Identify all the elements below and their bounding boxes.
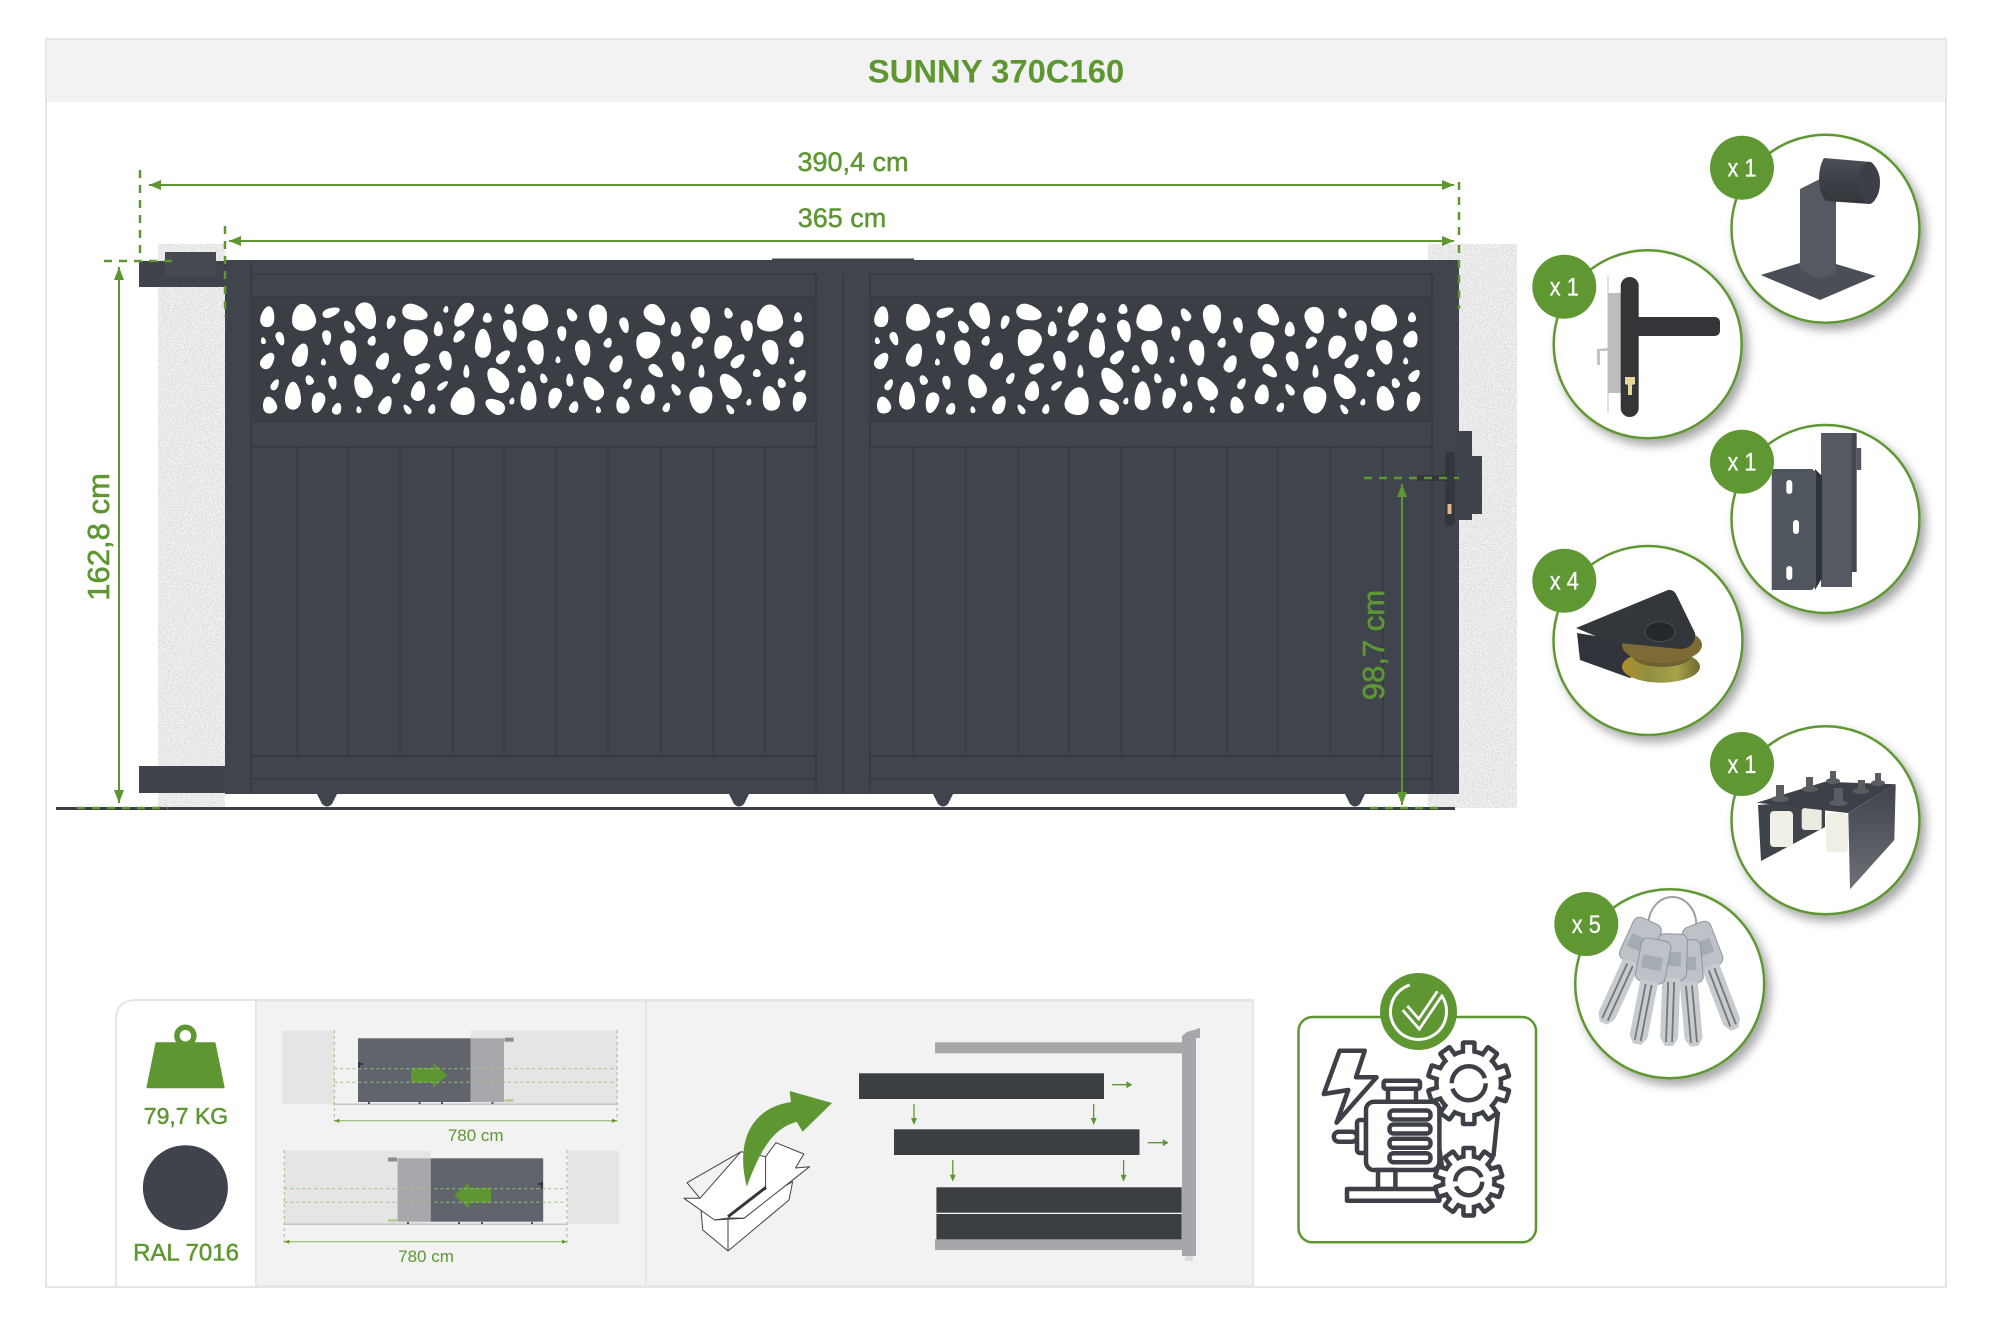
quantity badge xyxy=(1554,892,1618,956)
quantity badge xyxy=(1532,255,1596,319)
dimension: 365 cm: 365 cm xyxy=(798,203,886,233)
diagram: sliding right xyxy=(282,1030,617,1145)
quantity badge xyxy=(1710,732,1774,796)
quantity badge xyxy=(1710,430,1774,494)
upper wall bracket xyxy=(139,252,225,287)
accessory: gate stop post xyxy=(1710,135,1920,323)
fitting frame xyxy=(935,1028,1200,1261)
left wall pillar xyxy=(158,244,225,808)
dimension: 365 cm xyxy=(225,203,1459,317)
check badge xyxy=(1380,973,1457,1050)
left leaf perforated pattern xyxy=(258,299,808,418)
icon: open cardboard box xyxy=(684,1143,810,1251)
quantity badge: x 4 xyxy=(1550,568,1579,596)
right wall pillar xyxy=(1428,244,1517,808)
accessory: keys xyxy=(1554,889,1764,1078)
gear: upper xyxy=(1425,1040,1512,1126)
quantity badge: x 1 xyxy=(1550,274,1579,302)
diagram: sliding left xyxy=(284,1150,619,1266)
dimension: 98,7 cm xyxy=(1356,478,1459,808)
accessory: guide roller box xyxy=(1710,726,1920,914)
arrow: out of the box xyxy=(743,1091,832,1187)
title band xyxy=(47,40,1945,102)
motor card xyxy=(1298,973,1536,1242)
colour label: RAL 7016 xyxy=(133,1240,239,1266)
lower wall bracket xyxy=(139,766,225,793)
quantity badge: x 1 xyxy=(1728,751,1756,779)
quantity badge: x 1 xyxy=(1728,154,1756,182)
dimension: 390,4 cm xyxy=(140,147,1459,261)
ground line xyxy=(56,807,1455,810)
icon: motor and gears xyxy=(1324,1040,1512,1218)
dimension: 162,8 cm: 162,8 cm xyxy=(81,473,116,601)
colour swatch xyxy=(143,1145,228,1230)
perforated panel backgrounds xyxy=(252,298,1431,420)
lock and handle xyxy=(1416,431,1482,526)
gate wheels xyxy=(317,794,1365,806)
dimension: 162,8 cm xyxy=(77,261,175,808)
weight icon xyxy=(148,1027,224,1087)
right leaf perforated pattern xyxy=(872,299,1422,418)
cell: unpacking background xyxy=(646,1001,1253,1286)
accessory: lock keep bracket xyxy=(1710,425,1920,613)
quantity badge: x 5 xyxy=(1572,911,1601,939)
dimension: 98,7 cm: 98,7 cm xyxy=(1356,590,1391,700)
gear: lower xyxy=(1432,1146,1505,1218)
quantity badge: x 1 xyxy=(1728,448,1756,476)
cell: sliding diagrams background xyxy=(256,1001,646,1286)
assembly arrows xyxy=(911,1081,1169,1182)
diagram: sliding right: 780 cm xyxy=(448,1126,504,1145)
diagram: sliding left: 780 cm xyxy=(398,1247,454,1266)
weight label: 79,7 KG xyxy=(144,1103,228,1129)
accessory: handle xyxy=(1532,250,1742,438)
title: SUNNY 370C160 xyxy=(868,52,1124,90)
dimension: 390,4 cm: 390,4 cm xyxy=(797,147,909,177)
quantity badge xyxy=(1532,549,1596,613)
slat lines and stile lines xyxy=(251,260,1432,794)
top rails xyxy=(251,274,1432,779)
bottom info panel xyxy=(116,1000,1253,1287)
gate xyxy=(225,258,1459,794)
quantity badge xyxy=(1710,136,1774,200)
accessory: rolling wheel xyxy=(1532,546,1742,735)
stacked panels xyxy=(859,1073,1182,1239)
